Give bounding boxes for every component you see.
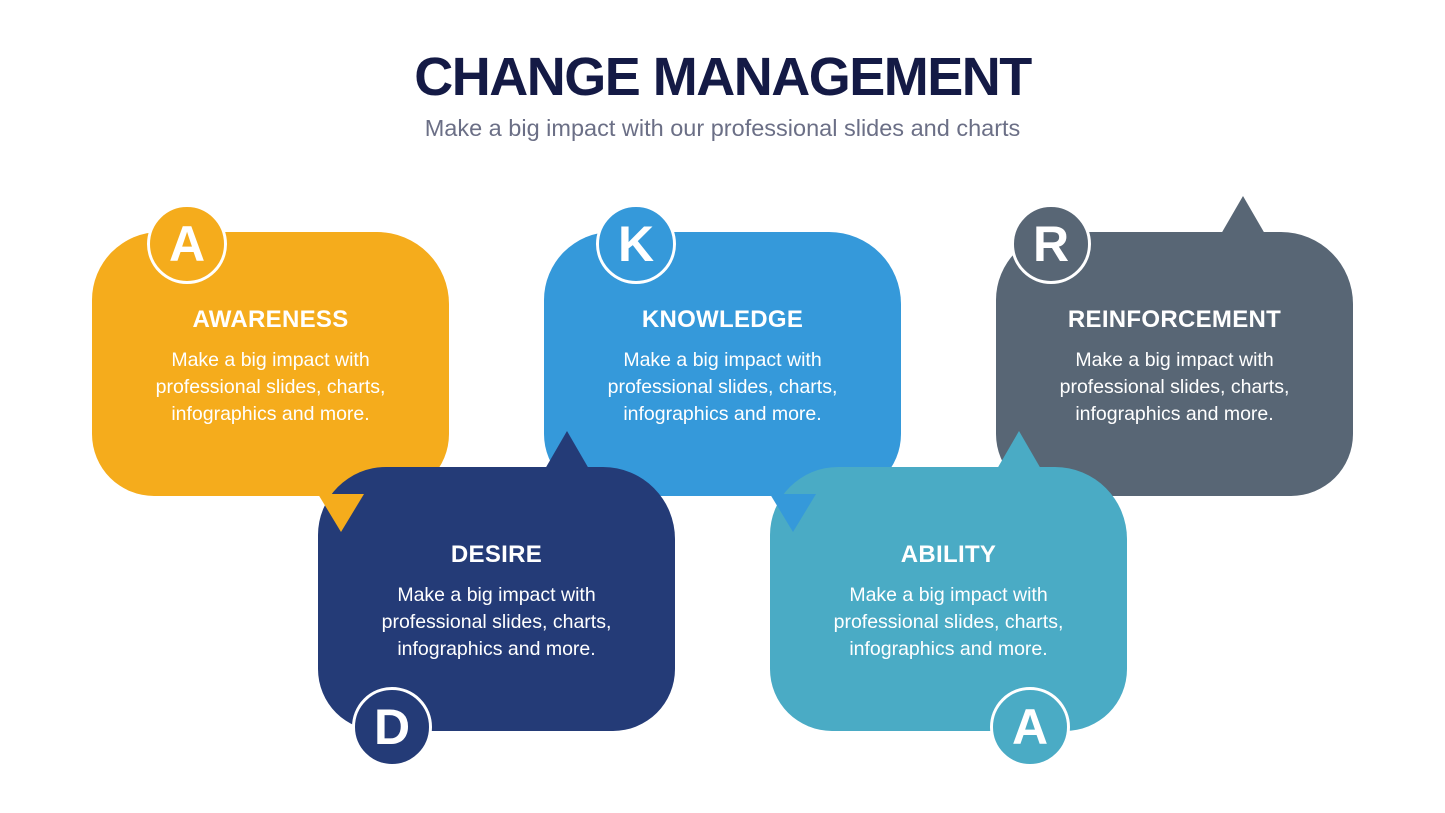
panel: awareness: infographics and more. (171, 403, 370, 425)
icon: D circle: D (374, 699, 410, 755)
panel: desire (318, 467, 675, 731)
title: CHANGE MANAGEMENT (414, 47, 1031, 107)
subtitle: Make a big impact with our professional slides and charts (425, 115, 1020, 141)
panel: knowledge: KNOWLEDGE (642, 306, 803, 333)
panel: reinforcement: professional slides, charts, (1060, 376, 1289, 398)
icon: K circle: K (618, 216, 654, 272)
panel: knowledge: professional slides, charts, (608, 376, 837, 398)
panel: awareness (92, 232, 449, 496)
icon: R circle (1011, 204, 1091, 284)
panel: ability: infographics and more. (849, 638, 1048, 660)
icon: A circle (147, 204, 227, 284)
panel: desire: Make a big impact with (397, 584, 596, 606)
panel: desire: DESIRE (451, 541, 542, 568)
icon: R circle: R (1033, 216, 1069, 272)
panel: knowledge (544, 232, 901, 496)
icon: A circle ability: A (1012, 699, 1048, 755)
panel: desire: infographics and more. (397, 638, 596, 660)
panel: awareness: professional slides, charts, (156, 376, 385, 398)
icon: A circle ability (990, 687, 1070, 767)
icon: D circle (352, 687, 432, 767)
panel: ability: ABILITY (901, 541, 996, 568)
panel: ability (770, 467, 1127, 731)
panel: reinforcement: REINFORCEMENT (1068, 306, 1281, 333)
panel: awareness: Make a big impact with (171, 349, 370, 371)
panel: reinforcement: infographics and more. (1075, 403, 1274, 425)
panel: reinforcement: Make a big impact with (1075, 349, 1274, 371)
icon: A circle: A (169, 216, 205, 272)
panel: desire: professional slides, charts, (382, 611, 611, 633)
icon: K circle (596, 204, 676, 284)
panel: knowledge: Make a big impact with (623, 349, 822, 371)
panel: knowledge: infographics and more. (623, 403, 822, 425)
panel: reinforcement (996, 232, 1353, 496)
panel: ability: Make a big impact with (849, 584, 1048, 606)
panel: awareness: AWARENESS (192, 306, 349, 333)
panel: ability: professional slides, charts, (834, 611, 1063, 633)
